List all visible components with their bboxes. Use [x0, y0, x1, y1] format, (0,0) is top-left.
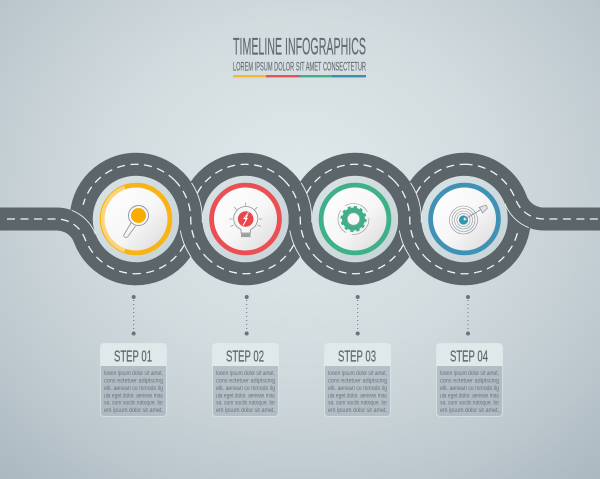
- icon: light bulb: [229, 202, 262, 237]
- heading: STEP 02: [226, 349, 264, 366]
- panel: step 04: [436, 344, 502, 416]
- text block: em ipsum dolor sit amet,: [440, 407, 499, 414]
- text block: ula eget dolor. aenean mas: [440, 392, 499, 400]
- icon: magnifying glass: [124, 206, 148, 238]
- text block: lorem ipsum dolor sit amet,: [440, 370, 499, 377]
- text block: [104, 370, 164, 414]
- panel: step 03: [324, 344, 390, 416]
- text: TIMELINE INFOGRAPHICS: [233, 34, 366, 60]
- text block: ula eget dolor. aenean mas: [216, 392, 275, 400]
- text block: sa. cum sociis natoque. lor: [216, 400, 276, 407]
- heading: STEP 03: [338, 349, 376, 366]
- step 1 disc: [93, 176, 179, 262]
- colour bar: [233, 75, 366, 77]
- connector 2: [245, 295, 249, 336]
- text block: [440, 370, 500, 414]
- connector 1: [132, 295, 136, 336]
- text block: lorem ipsum dolor sit amet,: [104, 370, 163, 377]
- connector 4: [466, 295, 470, 336]
- text block: lorem ipsum dolor sit amet,: [328, 370, 387, 377]
- panel: step 02: [212, 344, 278, 416]
- step 2 disc: [202, 176, 288, 262]
- text block: elit. aenean co mmodo lig: [328, 385, 387, 392]
- text block: [328, 370, 388, 414]
- heading: STEP 04: [450, 349, 488, 366]
- text block: cons ectetuer adipiscing: [328, 378, 387, 384]
- text block: ula eget dolor. aenean mas: [104, 392, 163, 400]
- connector 3: [356, 295, 360, 336]
- step 3 disc: [312, 176, 398, 262]
- text block: ula eget dolor. aenean mas: [328, 392, 387, 400]
- panel: step 01: [100, 344, 166, 416]
- text block: elit. aenean co mmodo lig: [104, 385, 163, 392]
- text block: elit. aenean co mmodo lig: [216, 385, 275, 392]
- text block: sa. cum sociis natoque. lor: [104, 400, 164, 407]
- text block: em ipsum dolor sit amet,: [328, 407, 387, 414]
- text block: sa. cum sociis natoque. lor: [328, 400, 388, 407]
- text block: [216, 370, 276, 414]
- text block: sa. cum sociis natoque. lor: [440, 400, 500, 407]
- text: LOREM IPSUM DOLOR SIT AMET CONSECTETUR: [233, 60, 366, 74]
- icon: target: [450, 205, 488, 234]
- text block: em ipsum dolor sit amet,: [216, 407, 275, 414]
- heading: STEP 01: [114, 349, 152, 366]
- text block: cons ectetuer adipiscing: [104, 378, 163, 384]
- icon: gear: [338, 204, 369, 234]
- winding road: [0, 164, 600, 274]
- text block: em ipsum dolor sit amet,: [104, 407, 163, 414]
- text block: cons ectetuer adipiscing: [216, 378, 275, 384]
- text block: elit. aenean co mmodo lig: [440, 385, 499, 392]
- text block: lorem ipsum dolor sit amet,: [216, 370, 275, 377]
- step 4 disc: [422, 176, 508, 262]
- title: [233, 34, 366, 74]
- text block: cons ectetuer adipiscing: [440, 378, 499, 384]
